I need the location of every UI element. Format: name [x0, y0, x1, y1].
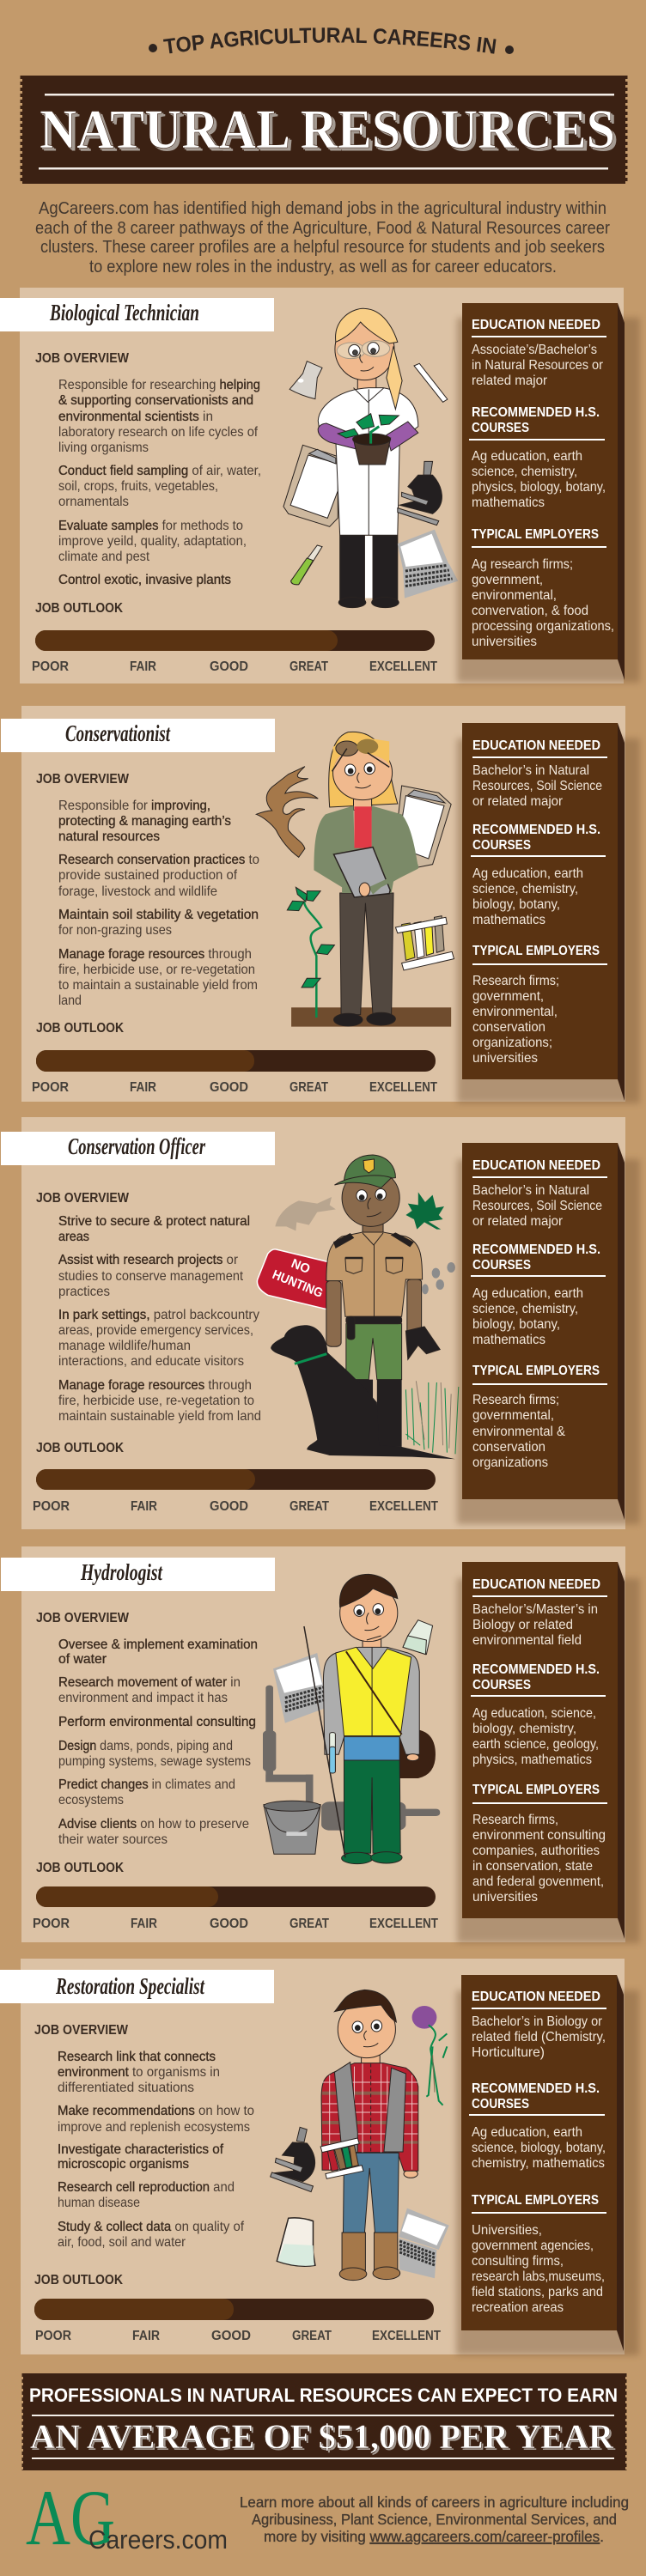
job overview text: Make recommendations on how to — [58, 2104, 254, 2118]
job overview text — [35, 351, 261, 587]
panel: education, courses, employers: and federal govenment, — [472, 1874, 604, 1889]
job overview text: JOB OVERVIEW — [36, 1611, 129, 1625]
panel: education, courses, employers: earth science, geology, — [472, 1737, 599, 1752]
job outlook bar: EXCELLENT — [369, 1917, 438, 1931]
job overview text: Oversee & implement examination — [58, 1637, 258, 1652]
panel: education, courses, employers: TYPICAL EMPLOYERS — [472, 944, 600, 958]
title tab: conservationist: Conservationist — [65, 720, 171, 746]
panel: education, courses, employers: Horticulture) — [472, 2045, 545, 2060]
job overview text: pumping systems, sewage systems — [58, 1754, 251, 1769]
job overview text: Design dams, ponds, piping and — [58, 1739, 233, 1753]
panel: education, courses, employers: COURSES — [472, 421, 529, 435]
panel: education, courses, employers: in conservation, state — [472, 1859, 593, 1874]
intro text: to explore new roles in the industry, as well as for career educators. — [89, 257, 557, 276]
job overview text: climate and pest — [58, 550, 149, 564]
job overview text: environment and impact it has — [58, 1691, 228, 1705]
job outlook bar: FAIR — [131, 1499, 157, 1514]
job overview text: maintain sustainable yield from land — [58, 1409, 261, 1424]
job overview text: air, food, soil and water — [58, 2235, 186, 2250]
job overview text: JOB OVERVIEW — [35, 351, 129, 366]
job overview text: provide sustained production of — [58, 868, 238, 883]
fold: education panel — [617, 1975, 624, 2351]
panel: education, courses, employers: mathematics — [472, 913, 545, 927]
job overview text: JOB OVERVIEW — [34, 2023, 128, 2038]
job overview text: human disease — [58, 2196, 140, 2210]
panel: education, courses, employers: chemistry, mathematics — [472, 2156, 605, 2171]
job overview text: Conduct field sampling of air, water, — [58, 464, 261, 478]
panel: education, courses, employers: research labs,museums, — [472, 2269, 605, 2284]
job overview text: areas, provide emergency services, — [58, 1323, 253, 1338]
shadow: education panel — [457, 738, 640, 1103]
panel: education, courses, employers: EDUCATION NEEDED — [472, 1158, 600, 1173]
panel: education, courses, employers — [462, 303, 618, 659]
panel: education, courses, employers: or related major — [472, 794, 564, 809]
panel: education, courses, employers: Resources, Soil Science — [472, 779, 602, 793]
panel: education, courses, employers: science, biology, botany, — [472, 2141, 606, 2155]
job overview text: fire, herbicide use, or re-vegetation — [58, 963, 255, 977]
fold: education panel — [618, 723, 625, 1101]
job overview text: areas — [58, 1230, 89, 1244]
job outlook bar: FAIR — [132, 2329, 160, 2343]
panel: education, courses, employers: universities — [472, 635, 537, 649]
footer text: more by visiting www.agcareers.com/career-profiles. — [264, 2528, 604, 2545]
job outlook bar: JOB OUTLOOK — [36, 1021, 125, 1036]
job overview text: improve and replenish ecosystems — [58, 2120, 250, 2135]
shadow: education panel — [457, 1159, 640, 1524]
panel: education, courses, employers: biology, botany, — [472, 897, 560, 912]
job overview text: Predict changes in climates and — [58, 1777, 235, 1792]
panel: education, courses, employers: biology, chemistry, — [472, 1722, 576, 1736]
job overview text: fire, herbicide use, re-vegetation to — [58, 1394, 254, 1408]
title tab: hydrologist — [1, 1558, 275, 1591]
title tab: biological technician — [0, 298, 274, 331]
job overview text: protecting & managing earth’s — [58, 814, 231, 829]
illustration: biological technician — [283, 308, 458, 608]
panel: education, courses, employers: biology, botany, — [472, 1317, 560, 1332]
job overview text: microscopic organisms — [58, 2157, 189, 2172]
panel: education, courses, employers: science, chemistry, — [472, 1302, 578, 1316]
job outlook bar: EXCELLENT — [372, 2329, 441, 2343]
title tab: conservation officer: Conservation Officer — [68, 1133, 205, 1159]
job overview text: soil, crops, fruits, vegetables, — [58, 479, 218, 494]
job overview text: ornamentals — [58, 495, 129, 509]
panel: education, courses, employers: TYPICAL EMPLOYERS — [472, 1364, 600, 1378]
job outlook bar: POOR — [35, 2329, 71, 2343]
job overview text: laboratory research on life cycles of — [58, 425, 259, 440]
panel: education, courses, employers: RECOMMENDED H.S. — [472, 405, 600, 420]
job outlook bar: EXCELLENT — [369, 1080, 437, 1095]
panel: education, courses, employers: COURSES — [472, 2097, 529, 2111]
sign: no hunting — [271, 1256, 325, 1301]
panel: education, courses, employers: convervation, & food — [472, 604, 588, 618]
job outlook bar: JOB OUTLOOK — [36, 1441, 125, 1455]
job overview text: Research movement of water in — [58, 1675, 241, 1690]
panel: education, courses, employers: government, — [472, 989, 544, 1004]
job overview text: practices — [58, 1285, 110, 1299]
shadow: education panel — [457, 1578, 640, 1943]
panel: education, courses, employers — [462, 723, 618, 1079]
panel: education, courses, employers: organizations — [472, 1455, 548, 1470]
job overview text: studies to conserve management — [58, 1269, 244, 1284]
panel: hydrologist — [1, 1546, 640, 1943]
shadow: education panel — [456, 1990, 639, 2355]
logo: agcareers.com — [26, 2474, 228, 2561]
job outlook bar: GOOD — [210, 1499, 248, 1514]
panel: education, courses, employers: Resources, Soil Science — [472, 1199, 602, 1213]
job outlook bar: POOR — [32, 659, 69, 674]
job overview text: Responsible for researching helping — [58, 378, 260, 392]
job overview text: JOB OVERVIEW — [36, 772, 129, 787]
panel: education, courses, employers: Ag education, science, — [472, 1706, 596, 1721]
panel: education, courses, employers: COURSES — [472, 1258, 531, 1273]
job overview text: Maintain soil stability & vegetation — [58, 908, 259, 922]
job overview text: manage wildlife/human — [58, 1339, 191, 1353]
panel: education, courses, employers: Ag research firms; — [472, 557, 573, 572]
job overview text: land — [58, 993, 82, 1008]
panel: education, courses, employers: RECOMMENDED H.S. — [472, 823, 600, 837]
illustration: conservationist — [256, 732, 454, 1027]
panel: education, courses, employers — [462, 1143, 618, 1499]
job overview text: In park settings, patrol backcountry — [58, 1308, 259, 1322]
title tab: hydrologist: Hydrologist — [80, 1559, 163, 1585]
panel: education, courses, employers: Ag education, earth — [472, 866, 583, 881]
panel: education, courses, employers: conservation — [472, 1440, 545, 1455]
job outlook bar: EXCELLENT — [369, 1499, 438, 1514]
panel: education, courses, employers: Universities, — [472, 2223, 542, 2238]
footer text: Agribusiness, Plant Science, Environmental Services, and — [252, 2511, 617, 2528]
intro text — [35, 198, 610, 276]
salary banner: AN AVERAGE OF $51,000 PER YEAR — [32, 2419, 616, 2458]
salary banner: PROFESSIONALS IN NATURAL RESOURCES CAN EXPECT TO EARN — [29, 2385, 618, 2406]
panel: education, courses, employers: companies, authorities — [472, 1844, 600, 1858]
panel: education, courses, employers: Research firms; — [472, 1393, 559, 1407]
job overview text: living organisms — [58, 440, 149, 455]
job outlook bar: EXCELLENT — [369, 659, 437, 674]
fold: education panel — [618, 1562, 625, 1939]
job outlook bar: JOB OUTLOOK — [36, 1861, 125, 1875]
title tab: biological technician: Biological Technician — [49, 300, 199, 325]
job overview text — [36, 1611, 258, 1847]
job outlook bar: GOOD — [211, 2329, 251, 2343]
panel: education, courses, employers — [462, 1562, 618, 1918]
fold: education panel — [618, 303, 625, 680]
panel: education, courses, employers: environmental & — [472, 1425, 565, 1439]
panel: education, courses, employers: environmental, — [472, 1005, 558, 1019]
job outlook bar: GREAT — [292, 2329, 332, 2343]
job overview text: Assist with research projects or — [58, 1253, 239, 1267]
panel: education, courses, employers: Ag education, earth — [472, 449, 582, 464]
panel: education, courses, employers: universities — [472, 1890, 538, 1905]
panel: education, courses, employers: Bachelor’s in Natural — [472, 1183, 589, 1198]
job overview text: to maintain a sustainable yield from — [58, 978, 258, 993]
job overview text: Research link that connects — [58, 2050, 216, 2064]
panel: education, courses, employers: COURSES — [472, 838, 531, 853]
job outlook bar: JOB OUTLOOK — [34, 2273, 124, 2287]
panel: biological technician — [0, 288, 640, 683]
panel: education, courses, employers: governmental, — [472, 1408, 554, 1423]
job outlook bar: FAIR — [130, 1080, 156, 1095]
sign: no hunting: NO — [289, 1256, 313, 1277]
job overview text: of water — [58, 1652, 107, 1667]
job overview text: forage, livestock and wildlife — [58, 884, 217, 899]
job overview text: their water sources — [58, 1832, 168, 1847]
job overview text: Strive to secure & protect natural — [58, 1214, 250, 1229]
job overview text — [34, 2023, 254, 2250]
job outlook bar: POOR — [33, 1499, 70, 1514]
job outlook bar: FAIR — [131, 1917, 157, 1931]
job overview text: Manage forage resources through — [58, 1378, 252, 1393]
job outlook bar: POOR — [32, 1080, 69, 1095]
job outlook bar: GREAT — [289, 1917, 329, 1931]
panel: education, courses, employers: RECOMMENDED H.S. — [472, 2081, 600, 2096]
panel: education, courses, employers: related field (Chemistry, — [472, 2030, 606, 2044]
panel: education, courses, employers: consulting firms, — [472, 2254, 564, 2269]
job overview text: environmental scientists in — [58, 410, 213, 424]
panel: education, courses, employers: government, — [472, 573, 543, 587]
panel: education, courses, employers: TYPICAL EMPLOYERS — [472, 527, 599, 542]
salary banner: AN AVERAGE OF $51,000 PER YEAR — [30, 2417, 614, 2456]
panel: conservationist — [1, 706, 640, 1103]
job overview text — [36, 1191, 261, 1424]
panel: education, courses, employers: recreation areas — [472, 2300, 564, 2315]
panel: education, courses, employers: Bachelor’s in Biology or — [472, 2014, 603, 2029]
heading: top agricultural careers in: TOP AGRICULTURAL CAREERS IN — [163, 27, 497, 54]
job outlook bar: FAIR — [130, 659, 156, 674]
salary banner — [23, 2373, 625, 2470]
job outlook bar — [34, 2273, 441, 2343]
job overview text: improve yeild, quality, adaptation, — [58, 534, 247, 549]
job overview text: Responsible for improving, — [58, 799, 210, 813]
panel: education, courses, employers: Ag education, earth — [472, 1286, 583, 1301]
panel: education, courses, employers: EDUCATION NEEDED — [472, 318, 600, 332]
panel: education, courses, employers: TYPICAL EMPLOYERS — [472, 2193, 599, 2208]
job overview text: natural resources — [58, 829, 160, 844]
panel: education, courses, employers: EDUCATION NEEDED — [472, 738, 600, 753]
illustration: hydrologist — [263, 1574, 440, 1864]
panel: education, courses, employers: in Natural Resources or — [472, 358, 604, 373]
panel: education, courses, employers: Associate’s/Bachelor’s — [472, 343, 597, 357]
logo: agcareers.com: Careers.com — [88, 2524, 228, 2555]
job outlook bar — [32, 601, 437, 674]
panel: education, courses, employers: environment consulting — [472, 1828, 606, 1843]
title banner: natural resources — [21, 76, 626, 184]
job outlook bar: POOR — [33, 1917, 70, 1931]
job overview text: ecosystems — [58, 1793, 124, 1807]
job overview text: Manage forage resources through — [58, 947, 252, 962]
panel: education, courses, employers: environmental field — [472, 1633, 582, 1648]
panel: education, courses, employers — [461, 1975, 617, 2330]
panel: education, courses, employers: physics, biology, botany, — [472, 480, 606, 495]
panel: education, courses, employers: EDUCATION NEEDED — [472, 1990, 600, 2004]
job outlook bar: GREAT — [289, 1499, 329, 1514]
panel: education, courses, employers: EDUCATION NEEDED — [472, 1577, 600, 1592]
title tab: restoration specialist — [0, 1970, 274, 2003]
job overview text: environment to organisms in — [58, 2065, 220, 2080]
panel: education, courses, employers: TYPICAL EMPLOYERS — [472, 1783, 600, 1797]
job overview text: Perform environmental consulting — [58, 1715, 256, 1729]
job outlook bar: GOOD — [210, 1080, 248, 1095]
panel: education, courses, employers: field stations, parks and — [472, 2285, 603, 2300]
panel: education, courses, employers: Research firms, — [472, 1813, 558, 1827]
job overview text: Study & collect data on quality of — [58, 2220, 245, 2234]
job overview text — [36, 772, 259, 1008]
logo: agcareers.com: AG — [26, 2474, 115, 2561]
panel: education, courses, employers: science, chemistry, — [472, 882, 578, 896]
fold: education panel — [618, 1143, 625, 1520]
panel: education, courses, employers: mathematics — [472, 495, 545, 510]
panel: education, courses, employers: Biology or related — [472, 1618, 573, 1632]
panel: education, courses, employers: related major — [472, 374, 548, 388]
job overview text: differentiated situations — [58, 2081, 194, 2095]
panel: education, courses, employers: COURSES — [472, 1678, 531, 1692]
job overview text: Evaluate samples for methods to — [58, 519, 243, 533]
panel: education, courses, employers: Ag education, earth — [472, 2125, 582, 2140]
title banner: natural resources: NATURAL RESOURCES — [40, 99, 615, 161]
panel: education, courses, employers: government agencies, — [472, 2239, 594, 2253]
panel: restoration specialist — [0, 1959, 639, 2355]
panel: education, courses, employers: science, chemistry, — [472, 465, 577, 479]
panel: education, courses, employers: universities — [472, 1051, 538, 1066]
footer text: Learn more about all kinds of careers in agriculture including — [240, 2494, 629, 2511]
panel: conservation officer — [1, 1117, 640, 1529]
panel: education, courses, employers: Bachelor’s/Master’s in — [472, 1602, 598, 1617]
job overview text: & supporting conservationists and — [58, 393, 253, 408]
illustration: conservation officer — [257, 1155, 459, 1459]
job overview text: JOB OVERVIEW — [36, 1191, 129, 1206]
job outlook bar: GOOD — [210, 1917, 248, 1931]
job outlook bar: GOOD — [210, 659, 248, 674]
job overview text: Control exotic, invasive plants — [58, 573, 231, 587]
title tab: restoration specialist: Restoration Specialist — [55, 1973, 205, 1999]
panel: education, courses, employers: organizations; — [472, 1036, 552, 1050]
panel: education, courses, employers: Bachelor’s in Natural — [472, 763, 589, 778]
job outlook bar — [33, 1441, 438, 1514]
illustration: restoration specialist — [271, 1990, 449, 2281]
panel: education, courses, employers: RECOMMENDED H.S. — [472, 1242, 600, 1257]
sign: no hunting: HUNTING — [271, 1267, 325, 1301]
job overview text: for non-grazing uses — [58, 923, 172, 938]
job outlook bar: GREAT — [289, 659, 328, 674]
job outlook bar — [33, 1861, 438, 1931]
title tab: conservation officer — [1, 1132, 275, 1165]
panel: education, courses, employers: environmental, — [472, 588, 557, 603]
panel: education, courses, employers: Research firms; — [472, 974, 559, 988]
panel: education, courses, employers: or related major — [472, 1214, 564, 1229]
panel: education, courses, employers: mathematics — [472, 1333, 545, 1347]
job overview text: Investigate characteristics of — [58, 2142, 224, 2157]
job outlook bar: JOB OUTLOOK — [35, 601, 124, 616]
shadow: education panel — [457, 318, 640, 683]
panel: education, courses, employers: conservation — [472, 1020, 545, 1035]
job overview text: Research conservation practices to — [58, 853, 259, 867]
footer text — [240, 2494, 629, 2545]
panel: education, courses, employers: RECOMMENDED H.S. — [472, 1662, 600, 1677]
job outlook bar — [32, 1021, 437, 1095]
job overview text: Research cell reproduction and — [58, 2180, 235, 2195]
job outlook bar: GREAT — [289, 1080, 328, 1095]
job overview text: Advise clients on how to preserve — [58, 1817, 249, 1832]
panel: education, courses, employers: physics, mathematics — [472, 1753, 592, 1767]
panel: education, courses, employers: processing organizations, — [472, 619, 614, 634]
title tab: conservationist — [1, 719, 275, 752]
job overview text: interactions, and educate visitors — [58, 1354, 244, 1369]
